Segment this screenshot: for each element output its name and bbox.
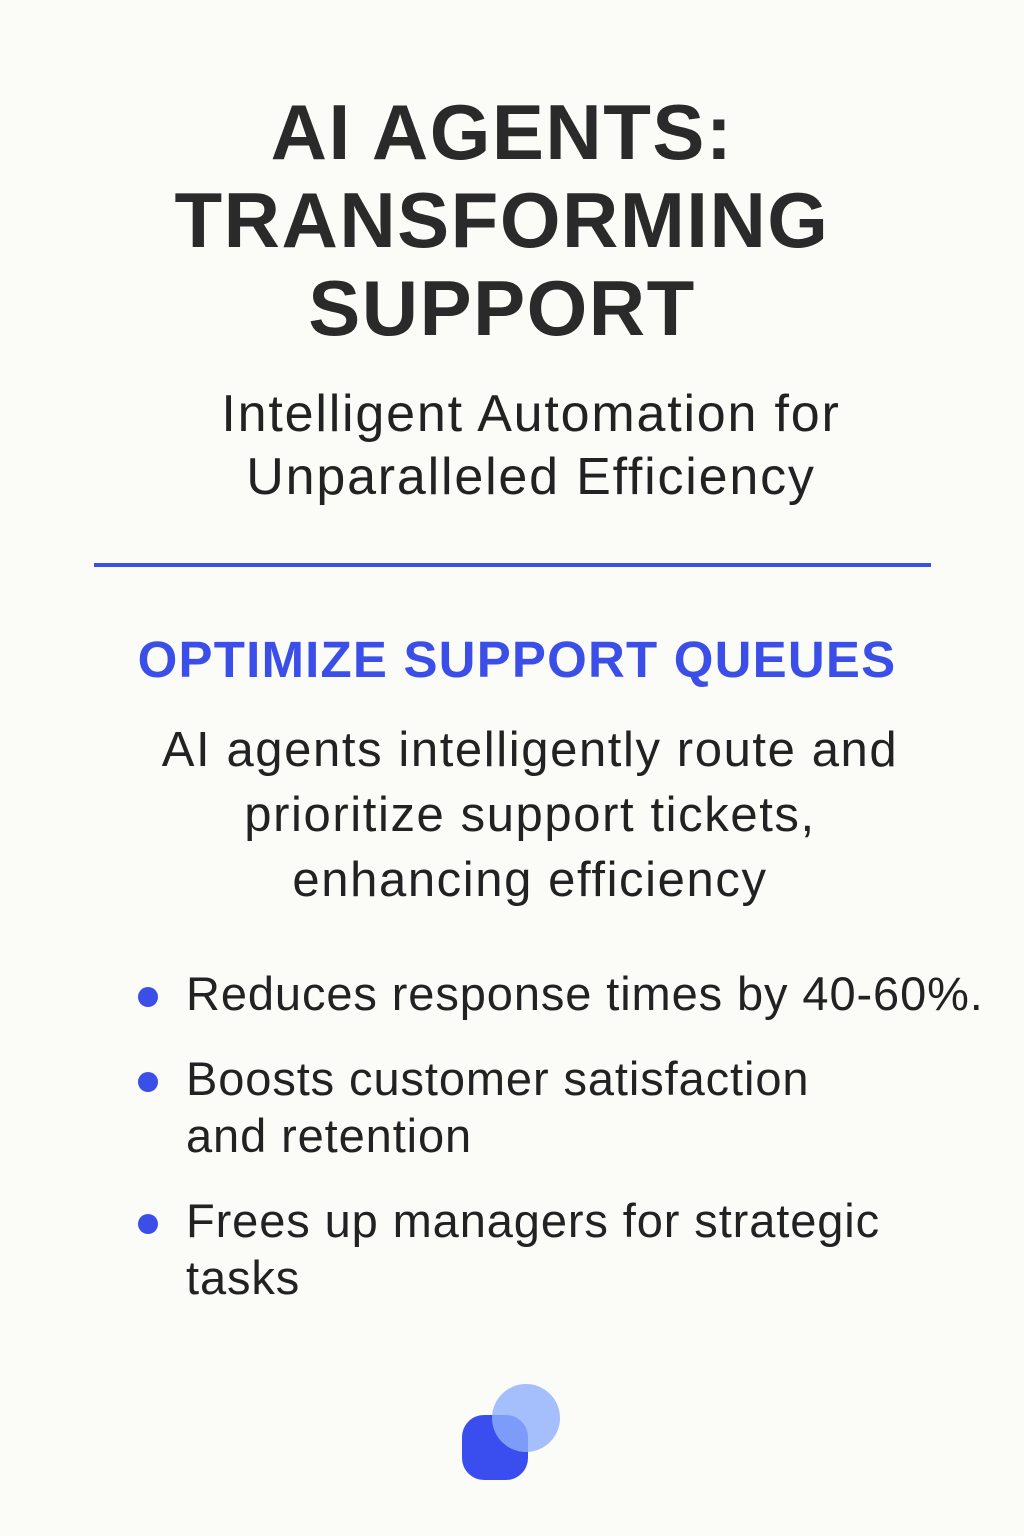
icon: logo [462, 1384, 560, 1480]
title: AI AGENTS: [271, 88, 733, 176]
title: TRANSFORMING [175, 176, 829, 264]
subtitle: Unparalleled Efficiency [246, 448, 816, 506]
subtitle: Intelligent Automation for [221, 385, 841, 443]
bullet: satisfaction [136, 1050, 1024, 1164]
description: AI agents intelligently route and [162, 723, 898, 777]
bullet: managers: tasks [186, 1251, 300, 1304]
bullet: managers [136, 1192, 1024, 1306]
bullet: response times: Reduces response times by 40-60%. [186, 967, 984, 1020]
bullet: managers: Frees up managers for strategic [186, 1194, 880, 1247]
description: enhancing efficiency [292, 853, 768, 907]
bullet: satisfaction: and retention [186, 1109, 472, 1162]
title: SUPPORT [308, 264, 696, 352]
description [162, 723, 898, 907]
title [175, 88, 829, 352]
bullet: satisfaction: Boosts customer satisfaction [186, 1052, 809, 1105]
description: prioritize support tickets, [244, 788, 816, 842]
bullet list [138, 967, 984, 1304]
subtitle [221, 385, 841, 506]
section heading: OPTIMIZE SUPPORT QUEUES [138, 631, 896, 688]
